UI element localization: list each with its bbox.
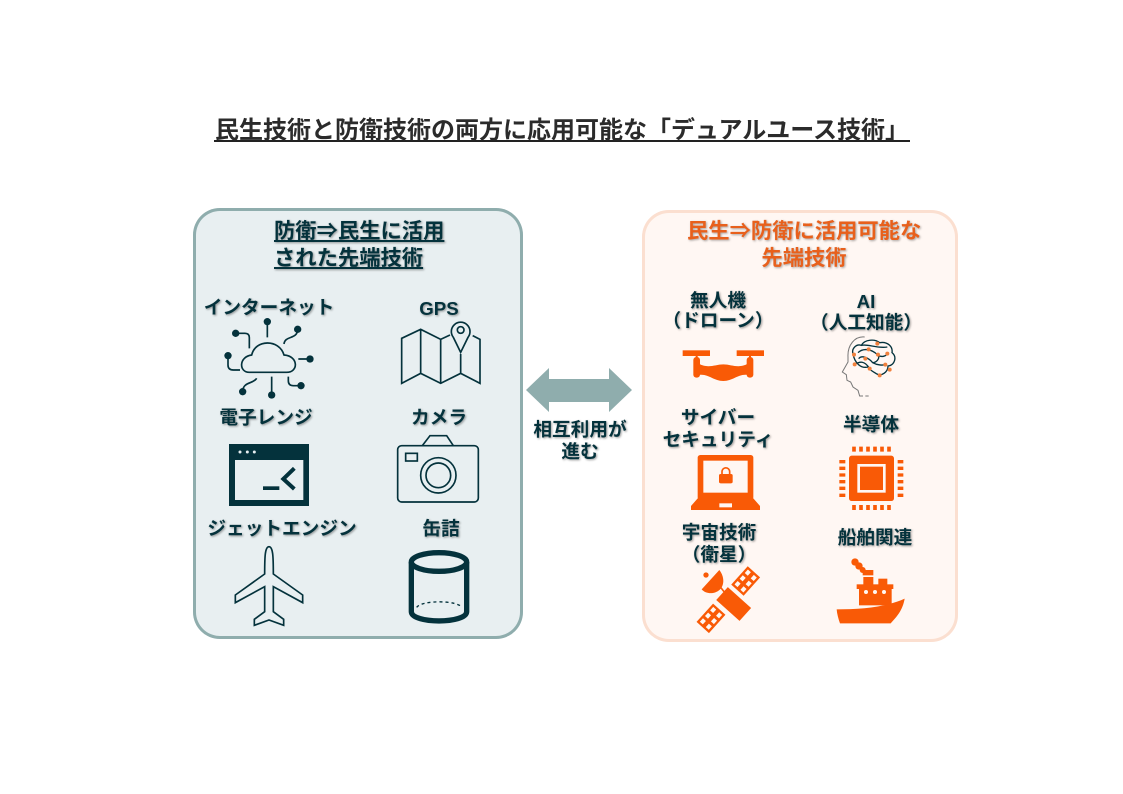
label: AI: AI	[857, 291, 875, 312]
label: drone: （ドローン）	[662, 310, 774, 331]
icon: laptop lock	[691, 455, 760, 510]
label: space technology	[682, 522, 758, 565]
label: cybersecurity: サイバー	[681, 407, 755, 428]
icon: ship	[836, 558, 905, 624]
label: space technology: 宇宙技術	[682, 522, 756, 543]
icon: camera	[396, 434, 480, 503]
icon: airplane	[234, 546, 304, 626]
label: AI	[810, 291, 922, 333]
title: 民生技術と防衛技術の両方に応用可能な「デュアルユース技術」	[215, 117, 909, 144]
heading: civilian to defense	[687, 219, 922, 270]
panel: civilian to defense	[642, 210, 958, 642]
heading: civilian to defense: 先端技術	[761, 246, 847, 270]
icon: can	[408, 550, 470, 624]
label: mutual use advancing: 進む	[561, 441, 599, 462]
label: microwave: 電子レンジ	[219, 407, 313, 428]
icon: AI brain	[842, 336, 896, 396]
icon: cloud network	[224, 318, 314, 399]
label: semiconductor: 半導体	[843, 414, 899, 435]
label: space technology: （衛星）	[682, 544, 756, 565]
label: canned food: 缶詰	[422, 518, 460, 539]
label: cybersecurity	[663, 407, 773, 450]
panel: defense to civilian	[193, 208, 523, 639]
label: cybersecurity: セキュリティ	[663, 429, 773, 450]
label: drone	[662, 290, 774, 331]
label: AI: （人工知能）	[810, 312, 922, 333]
icon: map with pin	[400, 321, 481, 385]
label: internet: インターネット	[204, 297, 334, 318]
icon: terminal window	[229, 444, 309, 506]
label: camera: カメラ	[411, 407, 467, 428]
label: drone: 無人機	[690, 290, 746, 311]
label: jet engine: ジェットエンジン	[207, 518, 357, 539]
heading: defense to civilian: された先端技術	[274, 246, 423, 270]
label: shipbuilding: 船舶関連	[838, 527, 912, 548]
heading: defense to civilian	[274, 219, 446, 272]
icon: chip	[839, 446, 904, 510]
icon: drone	[682, 350, 764, 381]
arrow: two-way	[526, 368, 632, 412]
icon: satellite	[696, 566, 760, 634]
heading: defense to civilian: 防衛⇒民生に活用	[274, 219, 444, 243]
label: mutual use advancing	[533, 419, 628, 462]
heading: civilian to defense: 民生⇒防衛に活用可能な	[687, 219, 921, 243]
label: GPS: GPS	[419, 298, 459, 319]
label: mutual use advancing: 相互利用が	[533, 419, 627, 440]
